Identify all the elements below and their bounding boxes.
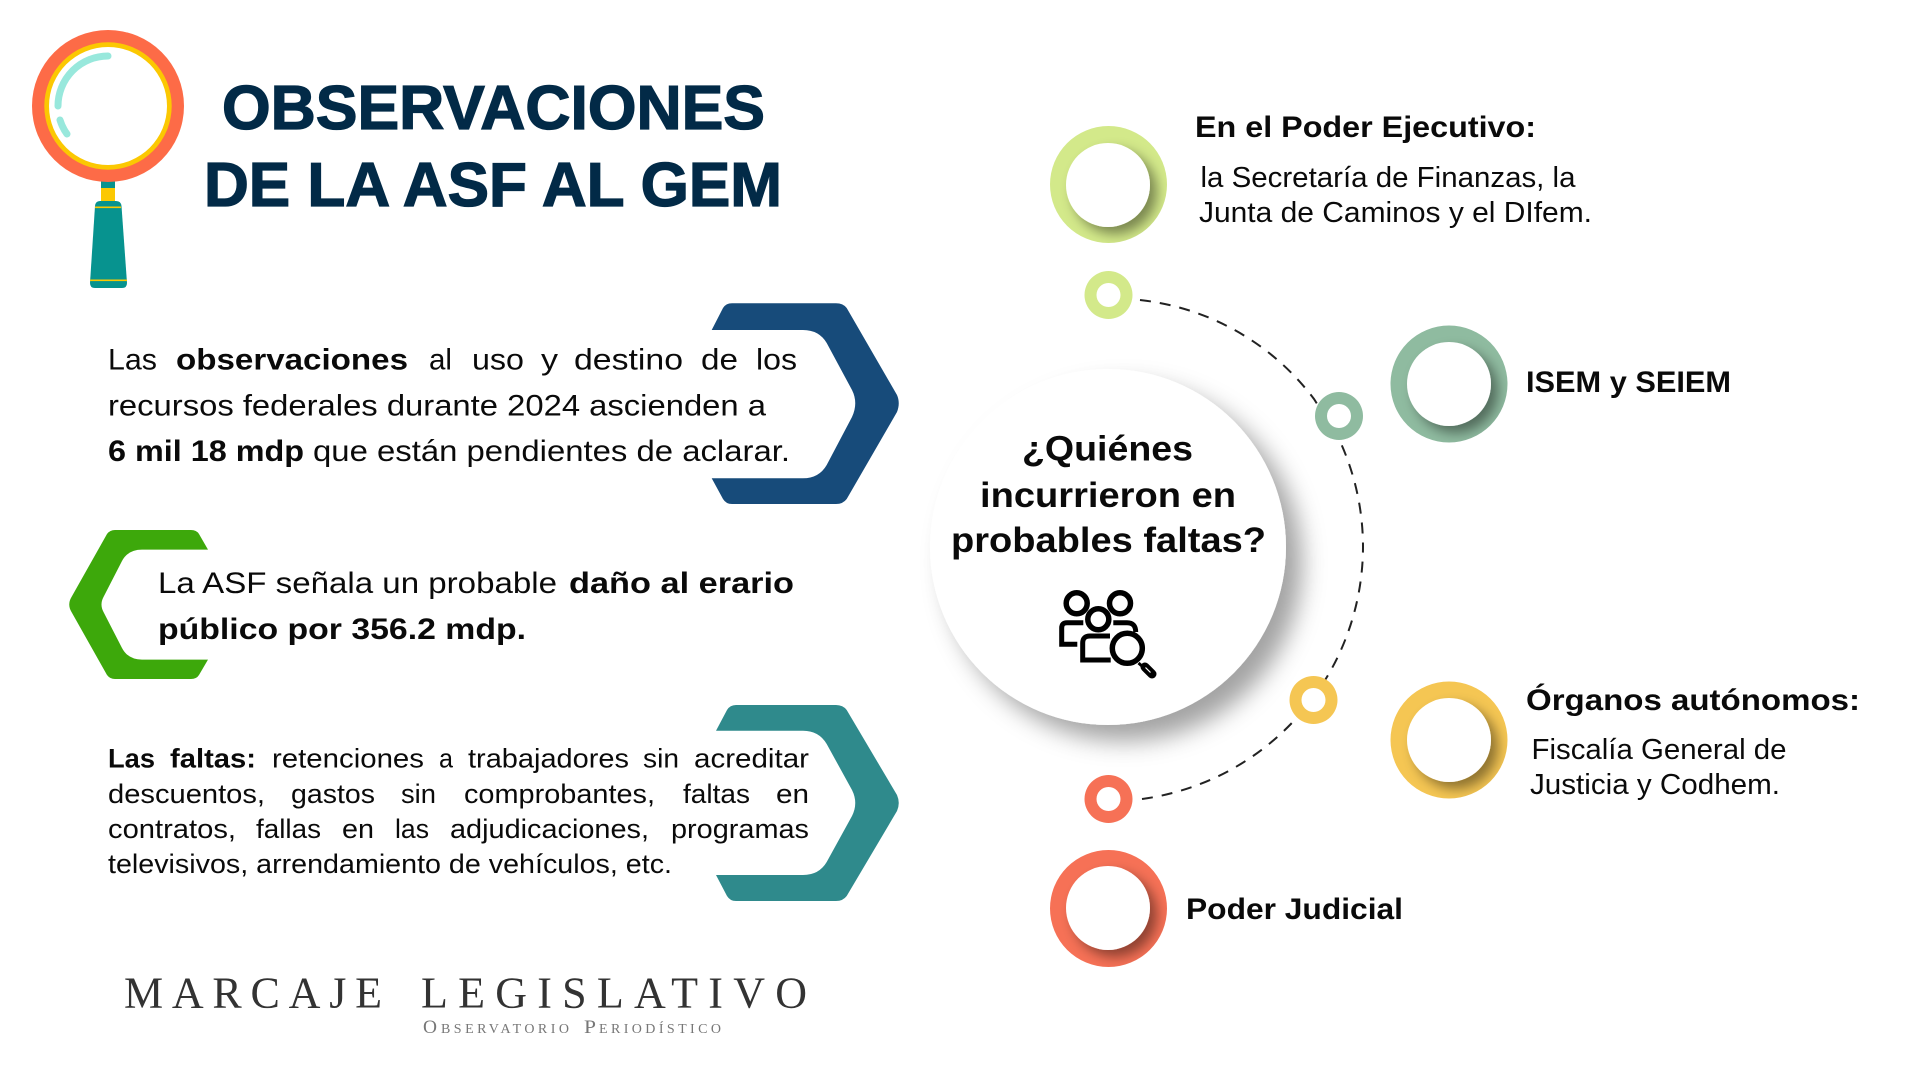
panel: teal chevron (716, 705, 899, 901)
text block: observaciones: Las (108, 344, 157, 376)
text block: observaciones: los (756, 344, 797, 376)
big ring: Poder Ejecutivo (1050, 126, 1167, 243)
heading: quiénes incurrieron (951, 430, 1266, 560)
icon: people with magnifier (1062, 593, 1152, 674)
text block: las faltas: faltas: (170, 744, 256, 774)
label: ISEM y SEIEM: ISEM y SEIEM (1526, 366, 1731, 399)
small ring: green (1084, 271, 1132, 319)
text block: las faltas: televisivos, arrendamiento de vehículos, etc. (108, 849, 672, 879)
label: Órganos autónomos: Fiscalía General de (1532, 734, 1786, 766)
icon: magnifying glass (32, 30, 184, 288)
dashed arc connector (1140, 300, 1363, 799)
logo: Marcaje Legislativo: ERIODÍSTICO (599, 1020, 721, 1037)
text block: las faltas: sin (643, 744, 679, 774)
logo: Marcaje Legislativo: BSERVATORIO (441, 1022, 569, 1037)
text block: las faltas: en (342, 814, 374, 844)
text block: observaciones: de (701, 344, 738, 376)
text block: daño al erario: La ASF señala un probable (158, 567, 557, 600)
text block: las faltas: contratos, (108, 814, 236, 844)
text block: las faltas: adjudicaciones, (450, 814, 649, 844)
logo: Marcaje Legislativo: O (423, 1017, 437, 1038)
text block: observaciones: observaciones (176, 344, 408, 376)
text block: observaciones: uso (472, 344, 524, 376)
text block: observaciones: 6 mil 18 mdp (108, 435, 304, 468)
text block: las faltas: fallas (256, 814, 321, 844)
small ring: sage (1315, 392, 1363, 440)
label: Órganos autónomos (1526, 683, 1860, 801)
big ring: ISEM y SEIEM (1390, 326, 1508, 442)
text block: las faltas: Las (108, 744, 155, 774)
text block: las faltas: retenciones (272, 744, 424, 774)
text block: las faltas: faltas (683, 779, 750, 809)
text block: las faltas: programas (671, 814, 809, 844)
text block: las faltas: sin (401, 779, 436, 809)
big ring: Poder Judicial (1050, 850, 1167, 967)
text block: observaciones: recursos federales durante 2024 ascienden a (108, 390, 766, 422)
text block: observaciones: al (429, 344, 452, 376)
text block: las faltas: en (776, 779, 809, 809)
panel: blue chevron (712, 303, 899, 504)
central circle (930, 369, 1286, 725)
label: Poder Ejecutivo: Junta de Caminos y el DIfem. (1199, 197, 1592, 229)
heading: quiénes incurrieron: ¿Quiénes (1022, 430, 1193, 468)
text block: observaciones: que están pendientes de aclarar. (313, 435, 790, 468)
text block: las faltas: gastos (291, 779, 375, 809)
heading: quiénes incurrieron: probables faltas? (951, 521, 1266, 560)
text block: las faltas: acreditar (694, 744, 809, 774)
label: Poder Ejecutivo: la Secretaría de Finanzas, la (1200, 162, 1576, 194)
label: Poder Ejecutivo (1195, 111, 1592, 229)
label: Órganos autónomos: Órganos autónomos: (1526, 683, 1860, 717)
title: OBSERVACIONES (222, 74, 765, 143)
title (204, 74, 782, 220)
title: DE LA ASF AL GEM (204, 151, 782, 220)
logo: Marcaje Legislativo (124, 968, 807, 1038)
text block: las faltas: trabajadores (468, 744, 629, 774)
text block: las faltas: las (395, 814, 429, 844)
logo: Marcaje Legislativo: MARCAJE (124, 968, 382, 1018)
label: Poder Ejecutivo: En el Poder Ejecutivo: (1195, 111, 1536, 144)
text block: daño al erario: daño al erario (569, 567, 794, 600)
big ring: Órganos autónomos (1390, 682, 1508, 798)
text block: observaciones: y (541, 344, 558, 376)
panel: green chevron (69, 530, 208, 679)
logo: Marcaje Legislativo: P (584, 1017, 596, 1038)
text block: daño al erario: público por 356.2 mdp. (158, 613, 526, 646)
logo: Marcaje Legislativo: LEGISLATIVO (421, 968, 807, 1018)
text block: observaciones: destino (574, 344, 683, 376)
heading: quiénes incurrieron: incurrieron en (980, 476, 1236, 515)
text block: las faltas: comprobantes, (464, 779, 655, 809)
label: Órganos autónomos: Justicia y Codhem. (1530, 769, 1780, 801)
small ring: red (1084, 775, 1132, 823)
text block: las faltas: a (439, 744, 453, 774)
label: Poder Judicial: Poder Judicial (1186, 893, 1403, 926)
text block: las faltas: descuentos, (108, 779, 265, 809)
small ring: yellow (1290, 676, 1338, 724)
